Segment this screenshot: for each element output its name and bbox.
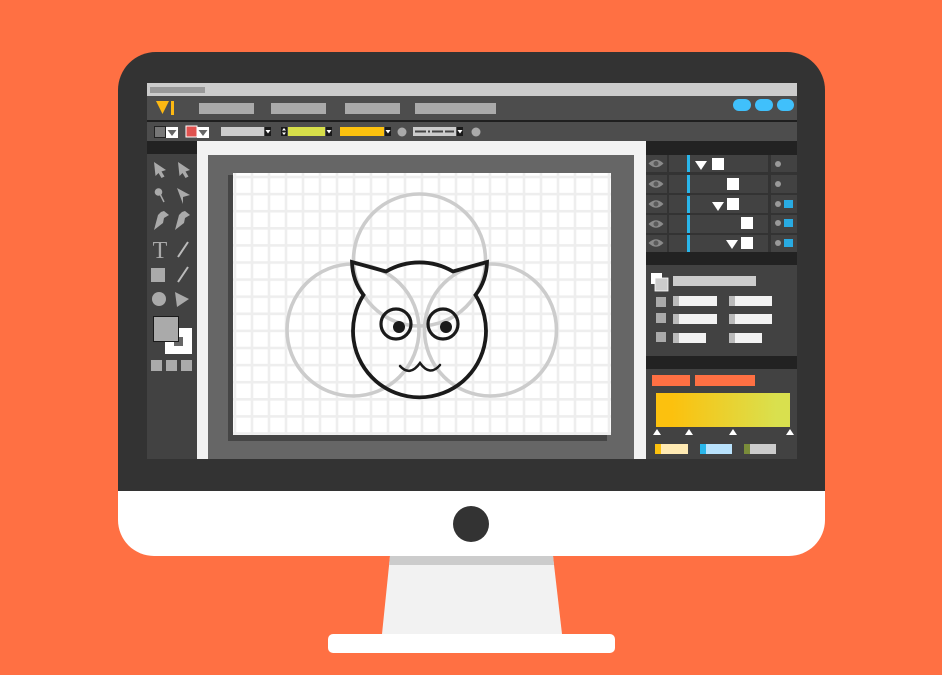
colour swatches <box>151 316 192 371</box>
construction circles <box>287 194 556 396</box>
panel: layers <box>646 141 797 459</box>
gradient bar <box>656 393 790 427</box>
layer rows <box>646 155 797 252</box>
menu bar <box>147 96 797 122</box>
canvas with grid <box>233 173 611 435</box>
monitor stand <box>328 556 615 653</box>
monitor button <box>453 506 489 542</box>
cat eyes <box>381 309 458 339</box>
gradient stops <box>653 429 794 435</box>
colour chips <box>655 444 776 454</box>
layer thumbnails <box>695 158 753 249</box>
panel: properties <box>646 252 797 356</box>
layer colour bars <box>687 155 690 252</box>
logo <box>156 101 174 115</box>
panel: gradient <box>646 356 797 459</box>
title bar <box>147 83 797 96</box>
application window <box>147 83 797 459</box>
options toolbar <box>147 122 797 141</box>
cat head outline <box>352 262 487 397</box>
tool icons: T <box>153 238 168 264</box>
monitor body <box>118 52 825 556</box>
tool icons <box>151 162 190 307</box>
cat mouth <box>400 363 440 371</box>
window control buttons <box>733 99 794 111</box>
workspace <box>197 141 646 459</box>
visibility eye icons <box>648 160 664 247</box>
panel: tools <box>147 141 197 459</box>
layer status markers <box>775 161 793 247</box>
cat face drawing <box>352 262 487 397</box>
